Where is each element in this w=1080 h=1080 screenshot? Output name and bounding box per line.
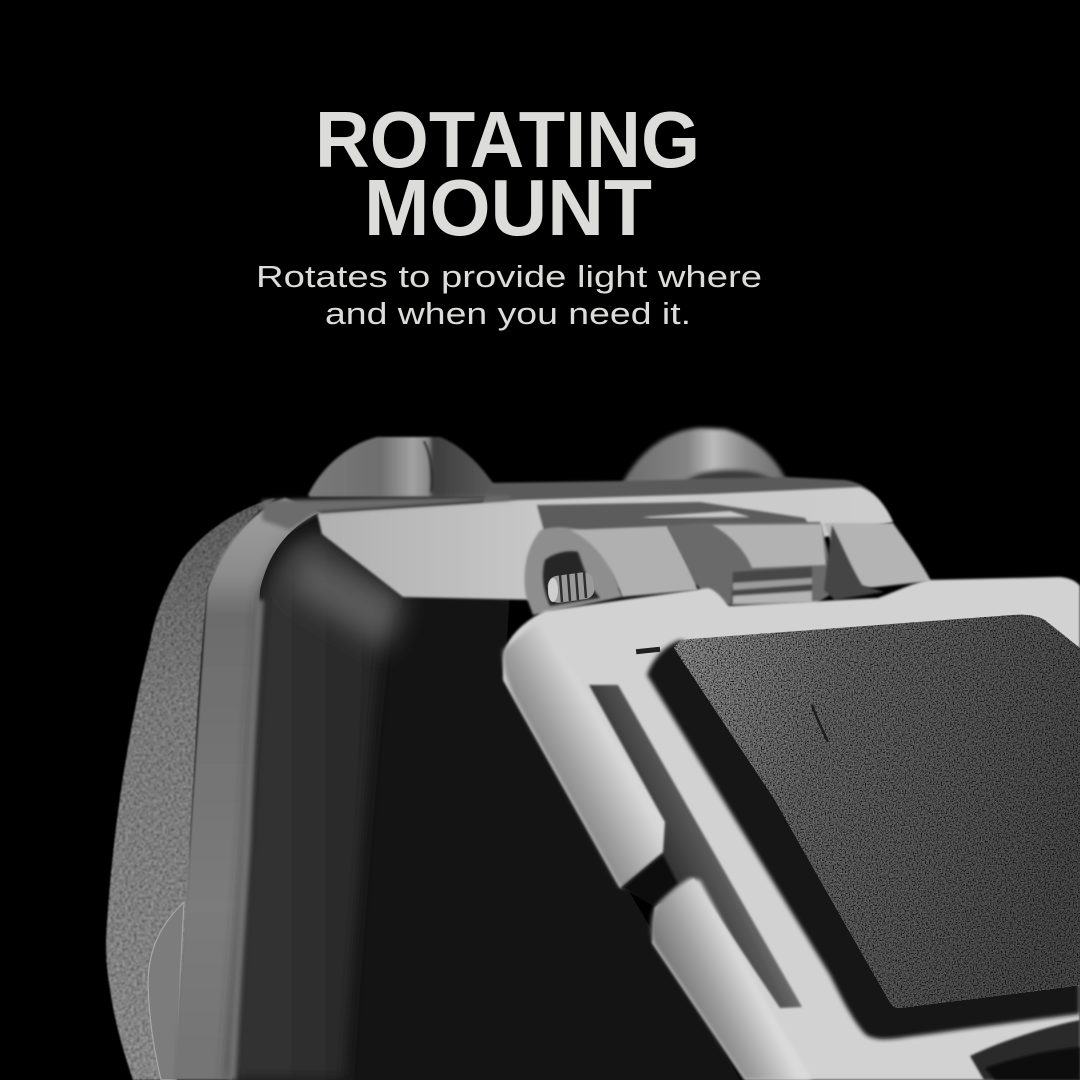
lighter vertical strip [173,498,322,1080]
title: rotating mount: ROTATING [315,95,700,184]
top chamfer [317,487,893,600]
description text: Rotates to provide light where [256,259,762,294]
plate body [503,577,1080,1080]
upper rear band [480,477,893,522]
small notch [636,647,660,654]
mid grey facet [228,530,400,1080]
description text: and when you need it. [325,296,691,331]
textured side shell [106,498,275,1080]
lower right slot interior [985,1047,1080,1080]
hinge end cap [524,527,622,615]
title: rotating mount: MOUNT [364,163,652,252]
hinge rear plate [537,502,835,590]
hinge highlight [642,511,750,518]
top edge band [262,496,510,530]
dark front face [232,513,740,1080]
hinge arm [570,526,698,597]
hinge right shadow [824,525,884,600]
product photo: headlamp housing and mount [106,428,1080,1080]
side finger recess [148,902,184,1080]
foam top surface [674,615,1080,1008]
soft strip to face transition [228,600,264,1080]
lower right dark slot [970,1020,1080,1080]
right light block [824,523,931,590]
upper tab side [503,620,665,888]
dark gap between tabs [623,855,678,907]
latch top [712,524,826,568]
facet upper glow [290,545,405,650]
hinge socket [543,551,600,606]
latch grip ridges [731,567,812,604]
channel between tabs [589,685,802,1008]
central latch [667,522,832,605]
foam shadow side [647,640,1080,1039]
foam mark [812,705,828,742]
hinge assembly [524,502,931,615]
screw [546,571,596,604]
right knob [622,428,787,490]
left knob [308,437,498,497]
description text [256,259,762,331]
mount plate [503,577,1080,1080]
foam pad [647,615,1080,1039]
lower tab [651,878,812,1080]
title: rotating mount [315,95,700,252]
